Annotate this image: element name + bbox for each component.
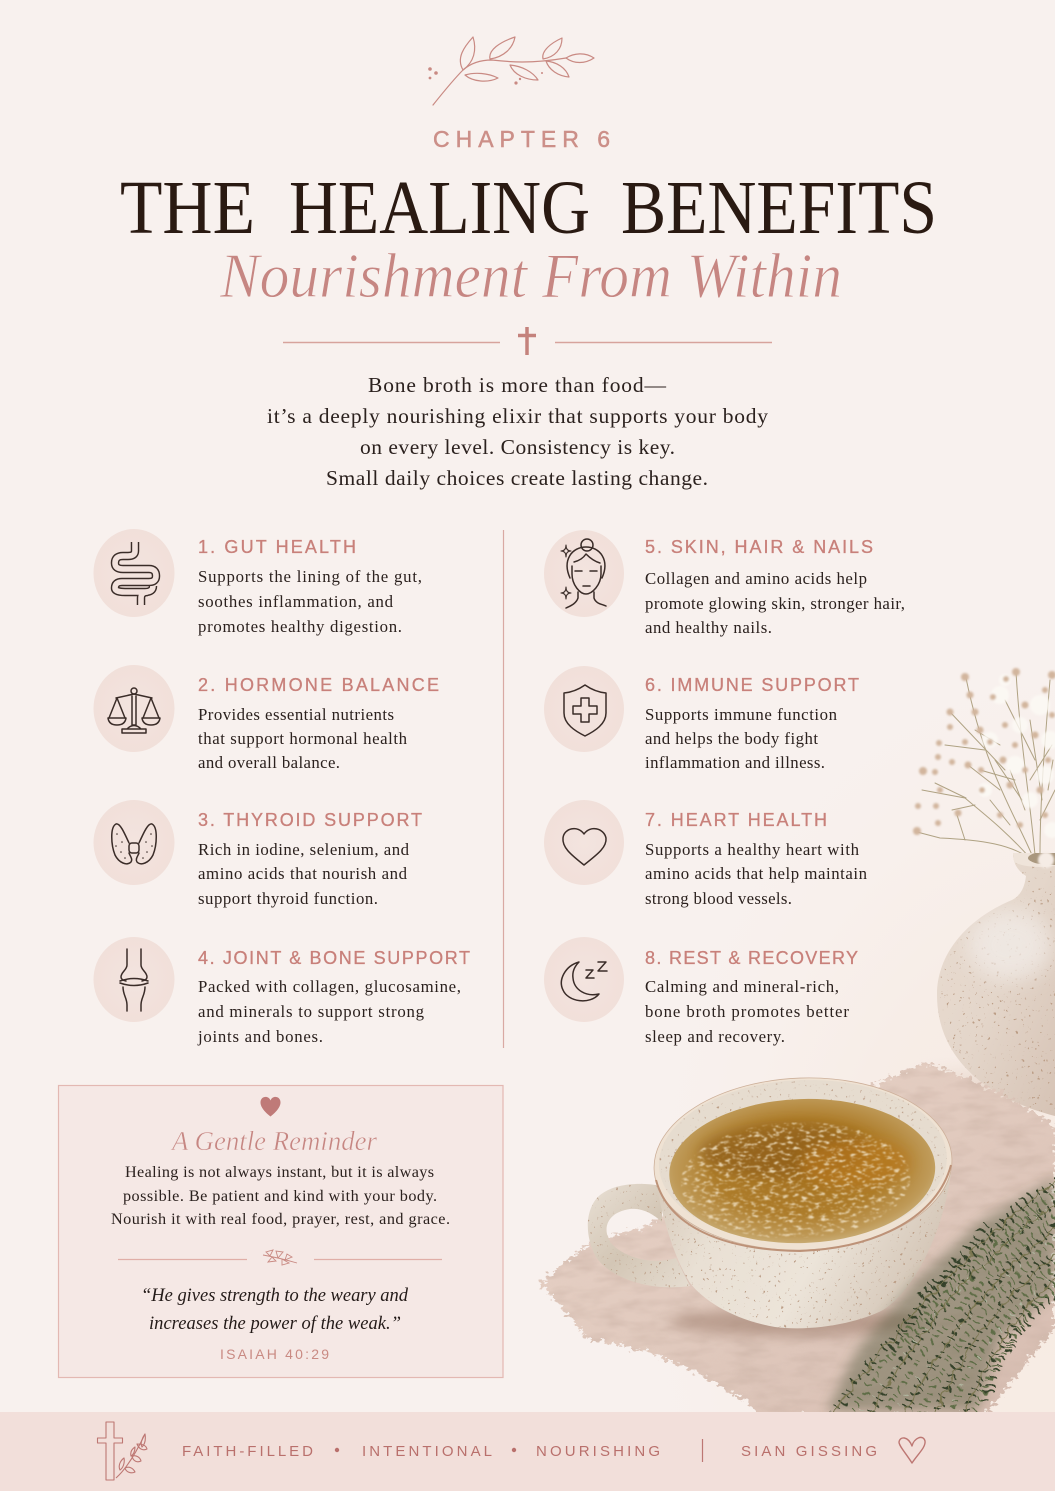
description — [645, 569, 905, 637]
intro paragraph: Bone broth is more than food— — [368, 373, 666, 397]
icon: shield with cross — [544, 666, 624, 752]
description: bone broth promotes better — [645, 1002, 849, 1021]
icon: intestines — [94, 529, 174, 617]
description: Rich in iodine, selenium, and — [198, 840, 410, 859]
vase glaze highlight — [968, 847, 1055, 981]
description — [645, 977, 849, 1046]
icon: heart — [260, 1097, 280, 1116]
benefit 7: heart health — [544, 800, 868, 908]
description — [198, 567, 422, 636]
panel message: Healing is not always instant, but it is always — [125, 1163, 434, 1181]
panel message: possible. Be patient and kind with your body. — [123, 1187, 437, 1205]
description: amino acids that nourish and — [198, 864, 408, 883]
description: joints and bones. — [197, 1027, 323, 1046]
scripture quote — [141, 1286, 409, 1334]
gypsophila blossoms — [913, 668, 1055, 838]
vase shadow — [915, 1072, 1055, 1108]
title: THE — [120, 166, 255, 250]
photo: bowl of bone broth — [588, 1073, 955, 1336]
description — [645, 705, 838, 772]
description: promotes healthy digestion. — [198, 617, 402, 636]
footer values: INTENTIONAL — [362, 1443, 492, 1460]
description: and minerals to support strong — [198, 1002, 425, 1021]
description: soothes inflammation, and — [198, 592, 394, 611]
heading: 4. JOINT & BONE SUPPORT — [198, 948, 470, 968]
description — [197, 977, 461, 1046]
heading: 8. REST & RECOVERY — [645, 948, 858, 968]
scripture reference: ISAIAH 40:29 — [220, 1346, 329, 1362]
title — [120, 166, 937, 250]
description — [645, 840, 868, 908]
description: support thyroid function. — [198, 889, 378, 908]
benefit 2: hormone balance — [94, 665, 439, 772]
description — [198, 840, 410, 908]
benefit 5: skin, hair and nails — [544, 530, 905, 637]
icon: cross with leaves — [98, 1422, 147, 1480]
column divider — [502, 530, 504, 1048]
footer band — [0, 1412, 1055, 1491]
icon: thyroid — [94, 800, 174, 885]
icon: floral sprig — [428, 37, 594, 105]
description: Supports immune function — [645, 705, 838, 724]
description: inflammation and illness. — [645, 753, 825, 772]
footer values: NOURISHING — [536, 1443, 660, 1460]
benefit 4: joint and bone support — [94, 937, 470, 1046]
description: promote glowing skin, stronger hair, — [645, 594, 905, 613]
bowl shadow — [670, 1308, 920, 1336]
benefit 8: rest and recovery — [544, 937, 858, 1046]
warm backdrop of photo — [520, 640, 1055, 1415]
description: Collagen and amino acids help — [645, 569, 867, 588]
footer values — [182, 1443, 660, 1460]
icon: heart outline — [544, 800, 624, 885]
description — [198, 705, 408, 772]
photo: linen cloth — [540, 1062, 1055, 1415]
subtitle: Nourishment From Within — [219, 240, 842, 311]
benefit 3: thyroid support — [94, 800, 422, 908]
title: HEALING — [289, 166, 590, 250]
intro paragraph: Small daily choices create lasting change. — [326, 466, 708, 490]
chapter label: CHAPTER 6 — [433, 126, 610, 152]
bowl rim — [651, 1073, 955, 1255]
bowl handle — [588, 1184, 690, 1287]
intro paragraph: on every level. Consistency is key. — [360, 435, 675, 459]
thyme foliage — [832, 1176, 1055, 1414]
description: and overall balance. — [198, 753, 340, 772]
icon: hand-drawn heart — [899, 1437, 925, 1463]
footer author: SIAN GISSING — [741, 1443, 877, 1460]
panel heading: A Gentle Reminder — [170, 1126, 377, 1156]
intro paragraph — [267, 373, 768, 490]
description: amino acids that help maintain — [645, 864, 868, 883]
divider with sprig — [118, 1250, 442, 1265]
panel: a gentle reminder — [58, 1086, 503, 1378]
scripture quote: increases the power of the weak.” — [149, 1314, 401, 1334]
thyme mass — [827, 1178, 1055, 1411]
white blossoms at vase mouth — [1038, 852, 1054, 868]
gypsophila stems — [917, 672, 1055, 858]
description: that support hormonal health — [198, 729, 408, 748]
heading: 6. IMMUNE SUPPORT — [645, 675, 859, 695]
description: strong blood vessels. — [645, 889, 792, 908]
benefit 1: gut health — [94, 529, 422, 636]
heading: 1. GUT HEALTH — [198, 537, 356, 557]
photo: thyme sprigs — [827, 1176, 1055, 1414]
divider with cross — [283, 327, 772, 355]
description: and healthy nails. — [645, 618, 772, 637]
heading: 5. SKIN, HAIR & NAILS — [645, 537, 873, 557]
rim terracotta edge — [656, 1165, 951, 1251]
vase body — [937, 853, 1055, 1116]
icon: balance scale — [94, 665, 174, 752]
icon: face with sparkles — [544, 530, 624, 617]
footer values: FAITH-FILLED — [182, 1443, 313, 1460]
scripture quote: “He gives strength to the weary and — [141, 1286, 409, 1306]
panel message: Nourish it with real food, prayer, rest, and grace. — [111, 1210, 450, 1228]
description: and helps the body fight — [645, 729, 818, 748]
description: Supports the lining of the gut, — [198, 567, 422, 586]
icon: knee joint — [94, 937, 174, 1022]
description: Provides essential nutrients — [198, 705, 394, 724]
heading: 3. THYROID SUPPORT — [198, 810, 422, 830]
heading: 2. HORMONE BALANCE — [198, 675, 439, 695]
description: sleep and recovery. — [645, 1027, 785, 1046]
icon: moon with z's — [544, 937, 624, 1022]
footer separator — [702, 1439, 704, 1462]
description: Packed with collagen, glucosamine, — [198, 977, 461, 996]
heading: 7. HEART HEALTH — [645, 810, 827, 830]
description: Supports a healthy heart with — [645, 840, 860, 859]
intro paragraph: it’s a deeply nourishing elixir that supports your body — [267, 404, 768, 428]
photo: dried flowers in speckled vase — [913, 668, 1055, 1116]
description: Calming and mineral-rich, — [645, 977, 839, 996]
benefit 6: immune support — [544, 666, 859, 772]
panel message — [111, 1163, 450, 1228]
bowl body — [655, 1165, 952, 1328]
title: BENEFITS — [621, 166, 937, 250]
